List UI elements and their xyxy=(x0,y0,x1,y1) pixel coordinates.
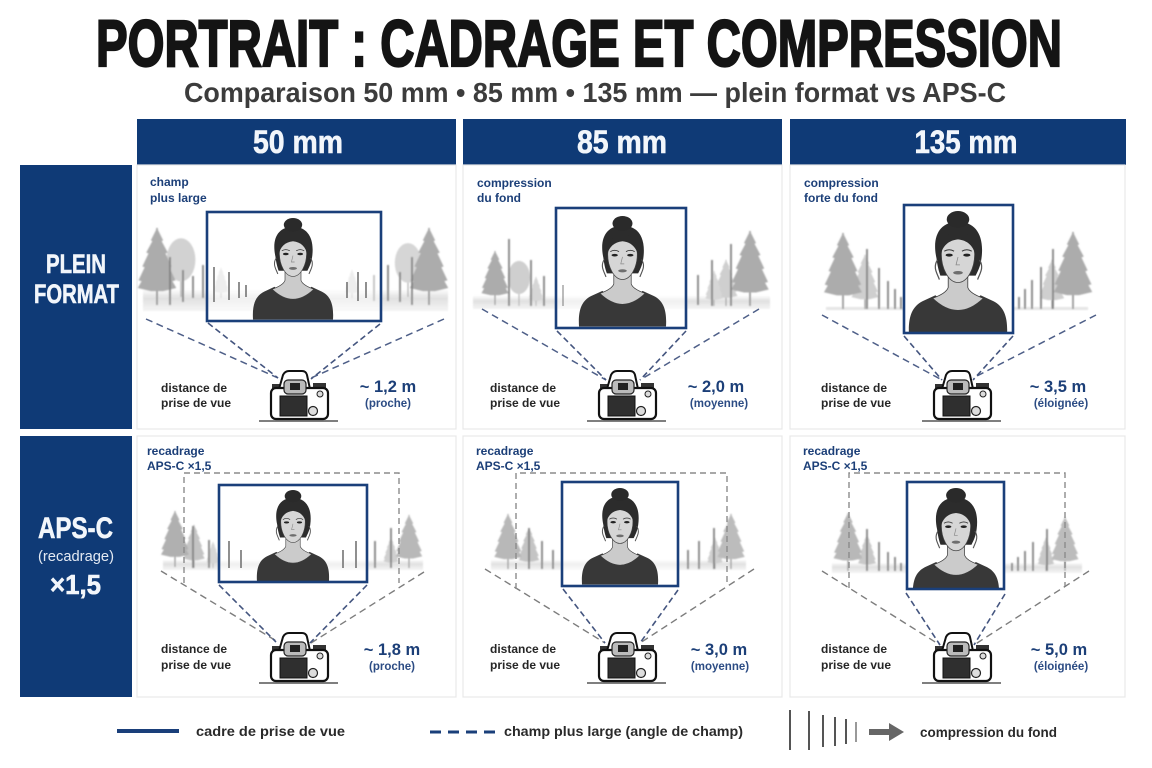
camera xyxy=(587,371,666,421)
full-frame crop outline xyxy=(184,473,399,583)
field of view dashes xyxy=(485,569,754,643)
row header: plein format xyxy=(20,165,132,429)
portrait xyxy=(909,211,1007,335)
camera xyxy=(922,633,1001,683)
camera xyxy=(587,633,666,683)
distance label: distance de xyxy=(161,642,227,656)
panel note: recadrage xyxy=(147,444,204,458)
distance value: (éloignée) xyxy=(1034,661,1088,673)
distance label: distance de xyxy=(821,381,887,395)
full-frame crop outline xyxy=(849,473,1065,588)
distance label: prise de vue xyxy=(161,396,231,410)
cadre frame interior xyxy=(206,211,381,321)
distance value: (moyenne) xyxy=(691,661,749,673)
camera xyxy=(259,371,338,421)
legend: solid frame line: cadre de prise de vue xyxy=(196,723,345,739)
field of view dashes xyxy=(482,309,759,380)
field of view dashes xyxy=(161,571,424,643)
shooting frame xyxy=(207,212,381,321)
distance label: prise de vue xyxy=(490,658,560,672)
distance label: distance de xyxy=(490,642,556,656)
shooting frame xyxy=(562,482,678,586)
legend xyxy=(117,710,1057,750)
row header: APS-C: ×1,5 xyxy=(50,569,101,600)
portrait xyxy=(579,216,666,326)
framing dashes xyxy=(906,593,1005,645)
panel note: forte du fond xyxy=(804,191,878,205)
framing dashes xyxy=(904,336,1013,380)
inner poles xyxy=(562,285,564,306)
background trees xyxy=(824,232,1092,310)
legend: background compression: compression du fond xyxy=(920,724,1057,740)
column header: 85 mm xyxy=(463,119,782,165)
portrait xyxy=(253,218,333,320)
panel note: recadrage xyxy=(803,444,860,458)
distance value: ~ 1,2 m xyxy=(360,378,416,396)
field of view dashes xyxy=(822,315,1096,380)
distance value: ~ 3,5 m xyxy=(1030,378,1086,396)
panel note: APS-C ×1,5 xyxy=(476,459,541,473)
background trees xyxy=(491,514,746,570)
camera xyxy=(259,633,338,683)
background trees xyxy=(138,228,448,311)
distance value: (proche) xyxy=(369,661,415,673)
distance value xyxy=(1030,378,1088,410)
panel note: plus large xyxy=(150,191,207,205)
shooting frame xyxy=(904,205,1013,333)
column header: 50 mm xyxy=(137,119,456,165)
framing dashes xyxy=(219,585,367,643)
distance value: (moyenne) xyxy=(690,398,748,410)
background trees xyxy=(473,231,770,309)
row header: plein format: FORMAT xyxy=(34,279,119,309)
panel note: APS-C ×1,5 xyxy=(147,459,212,473)
panel note: recadrage xyxy=(476,444,533,458)
legend: background compression xyxy=(790,710,1057,750)
panel note: champ xyxy=(150,175,189,189)
camera xyxy=(922,371,1001,421)
framing dashes xyxy=(208,323,380,379)
distance label: prise de vue xyxy=(821,658,891,672)
portrait xyxy=(913,488,999,597)
portrait xyxy=(582,488,658,585)
distance value xyxy=(360,378,416,410)
distance label: prise de vue xyxy=(161,658,231,672)
panel note: compression xyxy=(477,176,552,190)
distance label: prise de vue xyxy=(490,396,560,410)
inner poles xyxy=(229,541,356,568)
field of view dashes xyxy=(146,319,444,378)
distance value xyxy=(691,641,749,673)
full-frame crop outline xyxy=(516,473,727,589)
panel note: du fond xyxy=(477,191,521,205)
cadre frame interior xyxy=(556,208,686,328)
panel: APS-C 85 mm xyxy=(463,436,782,697)
panel note: compression xyxy=(804,176,879,190)
distance value: ~ 2,0 m xyxy=(688,378,744,396)
shooting frame xyxy=(556,208,686,328)
framing dashes xyxy=(557,331,686,380)
shooting frame xyxy=(907,482,1004,589)
column header: 135 mm xyxy=(790,119,1126,165)
distance label: distance de xyxy=(490,381,556,395)
distance value xyxy=(688,378,748,410)
background trees xyxy=(832,513,1082,573)
panel: plein format 50 mm xyxy=(137,165,456,429)
row header: plein format: PLEIN xyxy=(46,249,106,279)
row header: APS-C: APS-C xyxy=(38,512,113,545)
framing dashes xyxy=(563,589,678,643)
distance value xyxy=(1031,641,1088,673)
panel: APS-C 50 mm xyxy=(137,436,456,697)
distance label: prise de vue xyxy=(821,396,891,410)
column header: 135 mm: 135 mm xyxy=(914,124,1018,160)
cadre frame interior xyxy=(219,485,367,582)
distance value: (proche) xyxy=(365,398,411,410)
row header: APS-C: (recadrage) xyxy=(38,548,114,565)
distance value: ~ 5,0 m xyxy=(1031,641,1087,659)
panel: APS-C 135 mm xyxy=(790,436,1125,697)
distance label: distance de xyxy=(821,642,887,656)
shooting frame xyxy=(219,485,367,582)
field of view dashes xyxy=(822,571,1089,645)
column header: 50 mm: 50 mm xyxy=(253,124,343,160)
distance value: ~ 3,0 m xyxy=(691,641,747,659)
inner poles xyxy=(214,267,366,302)
distance label: distance de xyxy=(161,381,227,395)
panel note: APS-C ×1,5 xyxy=(803,459,868,473)
panel: plein format 85 mm xyxy=(463,165,782,429)
cadre frame interior xyxy=(907,482,1004,589)
distance value: ~ 1,8 m xyxy=(364,641,420,659)
column header: 85 mm: 85 mm xyxy=(577,124,667,160)
cadre frame interior xyxy=(562,482,678,586)
panel: plein format 135 mm xyxy=(790,165,1125,429)
legend: dashed field line: champ plus large (angle de champ) xyxy=(504,723,743,739)
distance value xyxy=(364,641,420,673)
distance value: (éloignée) xyxy=(1034,398,1088,410)
subtitle: Comparaison 50 mm • 85 mm • 135 mm — plein format vs APS-C xyxy=(184,77,1006,108)
background trees xyxy=(161,511,423,570)
row header: APS-C xyxy=(20,436,132,697)
portrait xyxy=(257,490,329,581)
cadre frame interior xyxy=(904,205,1013,333)
